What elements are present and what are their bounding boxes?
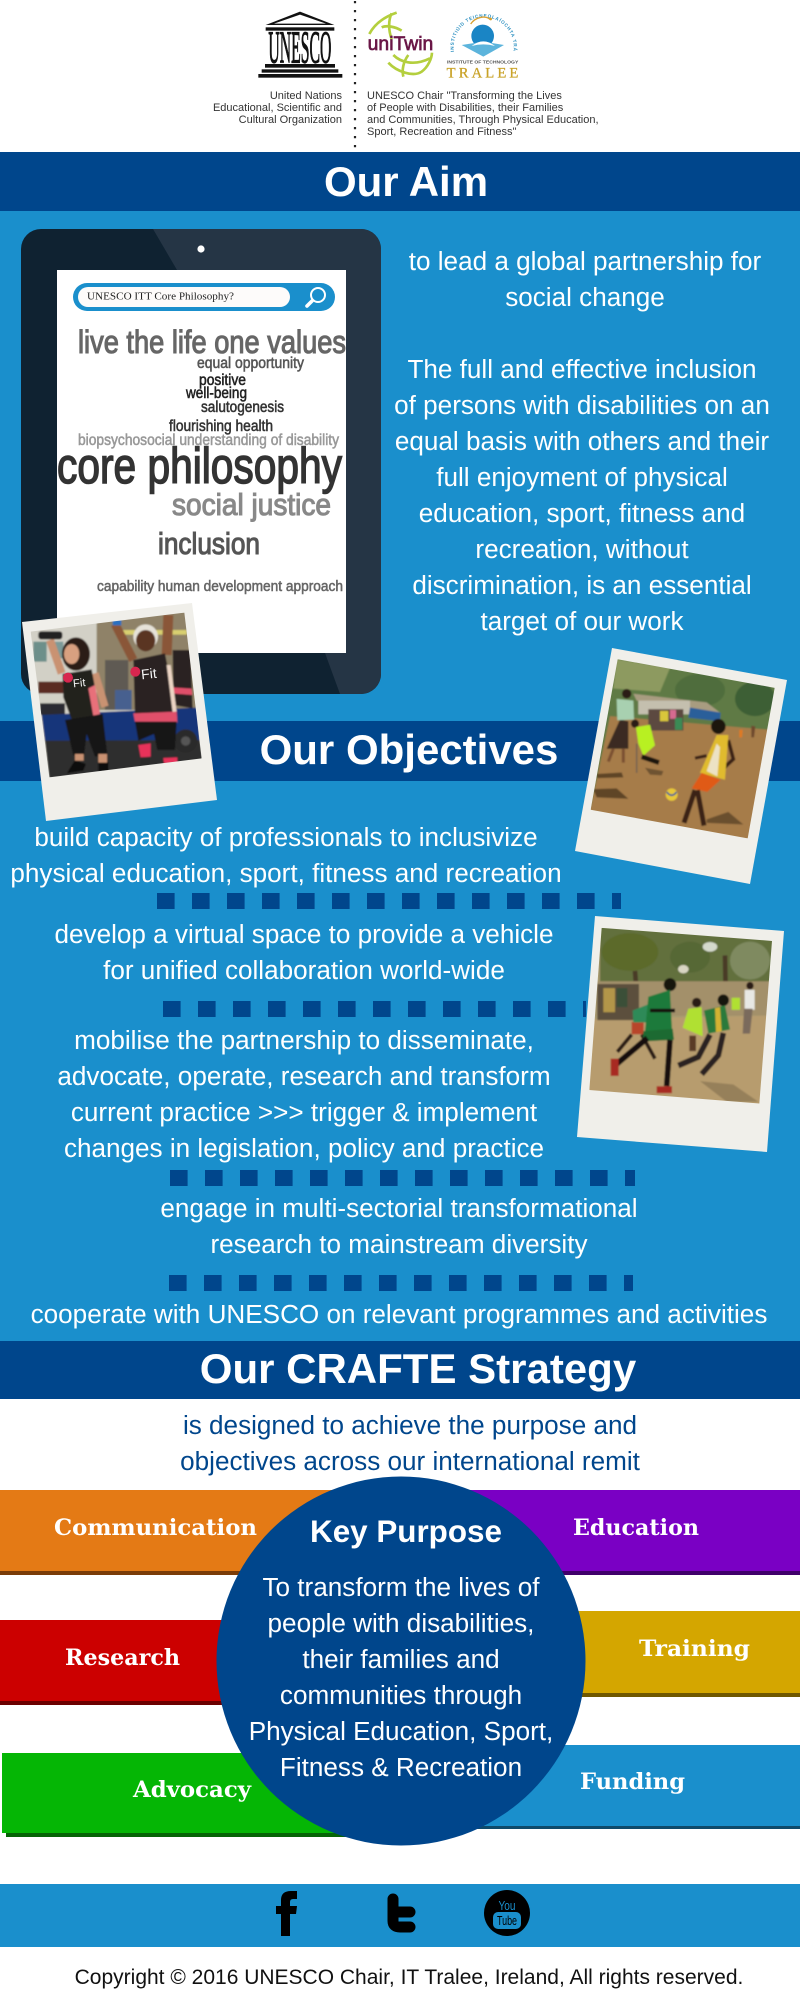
footer band: social media [0, 1884, 800, 1947]
text: purpose statement: To transform the lives of [262, 1572, 540, 1602]
bar: Research [0, 1620, 400, 1705]
bar: Advocacy [2, 1753, 406, 1837]
text: UNESCO Chair title [367, 90, 599, 138]
text block: aim statement: social change [505, 282, 665, 312]
text block: objective 4 [160, 1193, 638, 1259]
text: purpose statement: Physical Education, Sport, [249, 1716, 553, 1746]
word cloud: salutogenesis [201, 399, 284, 416]
text block: objective 1: physical education, sport, fitness and recreation [10, 858, 562, 888]
text block: objective 2: develop a virtual space to provide a vehicle [55, 919, 553, 949]
text: UNESCO Chair title: of People with Disabilities, their Families [367, 102, 564, 114]
logo: UNESCO temple: UNESCO [268, 23, 331, 74]
text block: aim statement: discrimination, is an essential [412, 570, 752, 600]
word cloud [57, 324, 346, 595]
heading band: Our Objectives [0, 721, 800, 781]
dotted divider [354, 1, 356, 150]
text: UNESCO Chair title: and Communities, Through Physical Education, [367, 114, 599, 126]
word cloud: capability human development approach [97, 578, 343, 595]
text: United Nations organisation name: Educational, Scientific and [213, 102, 342, 114]
bar: Advocacy: Advocacy [132, 1777, 252, 1803]
text: purpose statement: their families and [302, 1644, 500, 1674]
text: United Nations organisation name [213, 90, 342, 126]
text block: aim statement: The full and effective inclusion [407, 354, 757, 384]
bar: Training: Training [639, 1636, 750, 1662]
word cloud: well-being [185, 385, 247, 402]
icon: Twitter [393, 1899, 410, 1927]
bar: Communication: Communication [54, 1515, 257, 1541]
text block: objective 1 [10, 822, 562, 888]
text block: aim statement: education, sport, fitness and [419, 498, 745, 528]
text: United Nations organisation name: Cultural Organization [239, 114, 342, 126]
text block: objective 5: cooperate with UNESCO on relevant programmes and activities [31, 1299, 767, 1329]
text block: aim statement [394, 246, 770, 636]
text: purpose statement: Fitness & Recreation [280, 1752, 522, 1782]
icon: YouTube [484, 1890, 530, 1936]
bar: Funding: Funding [580, 1769, 685, 1795]
text block: aim statement: target of our work [480, 606, 684, 636]
word cloud: positive [199, 372, 246, 389]
text block: objective 4: engage in multi-sectorial transformational [160, 1193, 638, 1223]
icon: tablet with word cloud [21, 229, 381, 694]
text: UNESCO Chair title: UNESCO Chair "Transforming the Lives [367, 90, 562, 102]
text block: objective 3: changes in legislation, policy and practice [64, 1133, 544, 1163]
heading band: Our Aim [0, 152, 800, 211]
text block: CRAFTE intro: objectives across our international remit [180, 1446, 641, 1476]
circle: Key Purpose [216, 1476, 586, 1846]
text block: objective 4: research to mainstream diversity [210, 1229, 588, 1259]
logo: uniTwin: uniTwin [368, 34, 433, 55]
text: purpose statement [249, 1572, 553, 1782]
logo: UNESCO temple [258, 12, 342, 78]
word cloud: core philosophy [57, 438, 342, 494]
text: purpose statement: communities through [280, 1680, 522, 1710]
heading band: Our CRAFTE Strategy: Our CRAFTE Strategy [200, 1345, 637, 1392]
search bar [73, 283, 335, 311]
word cloud: biopsychosocial understanding of disability [78, 432, 339, 449]
bar: Education [400, 1490, 800, 1575]
header: logos and organisation names [213, 1, 599, 148]
word cloud: flourishing health [169, 418, 273, 435]
text block: objective 3: current practice >>> trigger & implement [71, 1097, 538, 1127]
word cloud: live the life one values [78, 324, 346, 360]
search bar: UNESCO ITT Core Philosophy? [87, 292, 234, 302]
heading band: Our Aim: Our Aim [324, 158, 488, 205]
text block: aim statement: to lead a global partnership for [409, 246, 762, 276]
panel: blue main background [0, 152, 800, 1341]
bar: Education: Education [573, 1515, 699, 1541]
footer: copyright: Copyright © 2016 UNESCO Chair, IT Tralee, Ireland, All rights reserved. [75, 1966, 743, 1989]
text block: aim statement: full enjoyment of physical [436, 462, 728, 492]
photo: polaroid of boys running on dusty pitch [577, 916, 784, 1152]
text block: objective 1: build capacity of professionals to inclusivize [34, 822, 538, 852]
bar: Training [400, 1611, 800, 1697]
bar: Research: Research [65, 1645, 180, 1671]
text block: objective 3: mobilise the partnership to disseminate, [74, 1025, 534, 1055]
heading: Key Purpose: Key Purpose [310, 1514, 502, 1549]
icon: YouTube: Tube [497, 1913, 517, 1928]
photo: polaroid of two women lifting weights: Fit [72, 677, 87, 690]
icon: Facebook [276, 1891, 297, 1936]
text block: aim statement: recreation, without [475, 534, 689, 564]
text block: objective 2 [55, 919, 553, 985]
heading band: Our CRAFTE Strategy [0, 1341, 800, 1399]
word cloud: inclusion [158, 526, 260, 561]
logo: Institute of Technology Tralee [446, 14, 519, 81]
logo: Institute of Technology Tralee: TRALEE [447, 65, 518, 81]
text: UNESCO Chair title: Sport, Recreation and Fitness" [367, 126, 517, 138]
text: purpose statement: people with disabilities, [268, 1608, 534, 1638]
text: United Nations organisation name: United Nations [270, 90, 342, 102]
photo: polaroid of two women lifting weights [22, 603, 217, 821]
text block: objective 3: advocate, operate, research and transform [57, 1061, 551, 1091]
text block: CRAFTE intro [180, 1410, 641, 1476]
text block: objective 3 [57, 1025, 551, 1163]
text block: aim statement: equal basis with others and their [395, 426, 769, 456]
word cloud: social justice [172, 487, 331, 522]
logo: uniTwin [368, 13, 433, 77]
bar: Funding [400, 1745, 800, 1829]
text block: CRAFTE intro: is designed to achieve the purpose and [183, 1410, 637, 1440]
photo: polaroid of two women lifting weights: Fit [140, 665, 158, 682]
photo: polaroid of football player with crutches [575, 648, 787, 884]
icon: YouTube: You [498, 1898, 516, 1913]
word cloud: equal opportunity [197, 355, 304, 372]
heading band: Our Objectives: Our Objectives [260, 726, 558, 773]
logo: Institute of Technology Tralee: INSTITUTE OF TECHNOLOGY [447, 60, 519, 65]
text block: objective 2: for unified collaboration world-wide [103, 955, 505, 985]
bar: Communication [0, 1490, 400, 1575]
text block: aim statement: of persons with disabilities on an [394, 390, 770, 420]
